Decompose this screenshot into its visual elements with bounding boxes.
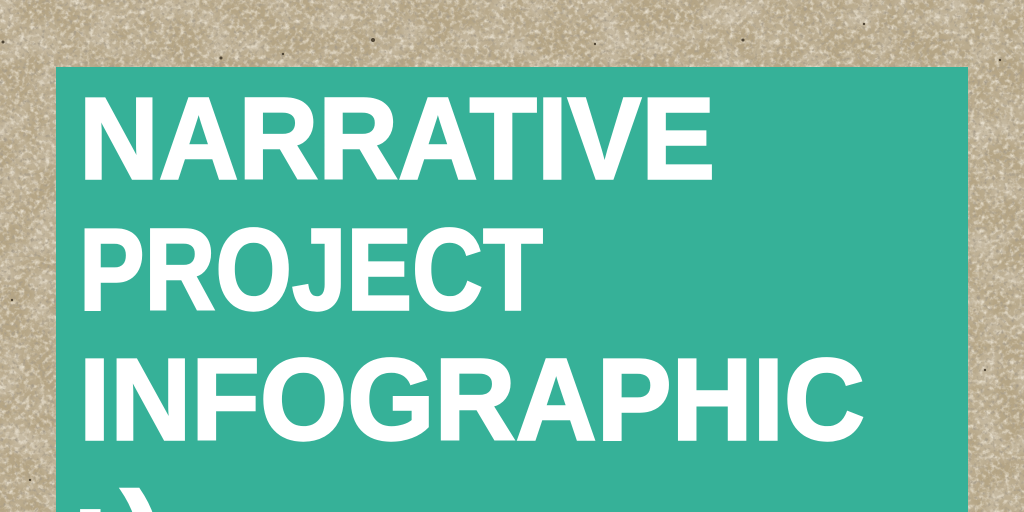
heading: title lines: INFOGRAPHIC (79, 334, 865, 464)
heading: title lines: NARRATIVE (79, 74, 715, 204)
heading: title lines (69, 74, 865, 512)
panel: green title card (56, 67, 968, 512)
heading: title lines: PROJECT (79, 204, 543, 334)
